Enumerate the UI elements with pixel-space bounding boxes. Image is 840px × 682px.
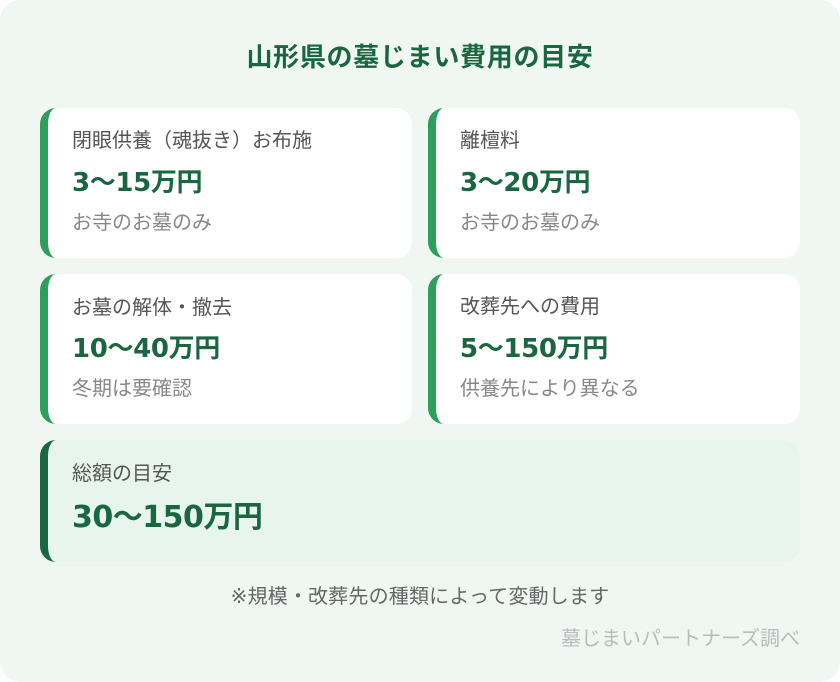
card value: 10〜40万円 — [72, 334, 220, 364]
card note: お寺のお墓のみ — [460, 210, 600, 234]
card label: ・ — [172, 291, 192, 320]
footnote: ※規模 改葬先の種類によって変動します — [231, 584, 609, 608]
footnote: ・ — [288, 580, 308, 609]
card: お墓の解体・撤去 — [40, 274, 412, 424]
card value: 3〜20万円 — [460, 168, 590, 198]
total label: 総額の目安 — [72, 461, 172, 485]
card note: 供養先により異なる — [460, 376, 640, 400]
card label: 離檀料 — [460, 128, 520, 152]
title: 山形県の墓じまい費用の目安 — [246, 43, 594, 73]
card label: お墓の解体 撤去 — [72, 295, 232, 319]
card label: 閉眼供養（魂抜き）お布施 — [72, 128, 312, 152]
card: 改葬先への費用 — [428, 274, 800, 424]
source credit: 墓じまいパートナーズ調べ — [561, 626, 800, 650]
card: 閉眼供養 — [40, 108, 412, 258]
card note: お寺のお墓のみ — [72, 210, 212, 234]
card note: 冬期は要確認 — [72, 376, 192, 400]
card value: 3〜15万円 — [72, 168, 202, 198]
card value: 5〜150万円 — [460, 334, 608, 364]
card label: 改葬先への費用 — [460, 294, 600, 318]
card: 総額の目安 — [40, 440, 800, 562]
card: 離檀料 — [428, 108, 800, 258]
total value: 30〜150万円 — [72, 500, 262, 535]
